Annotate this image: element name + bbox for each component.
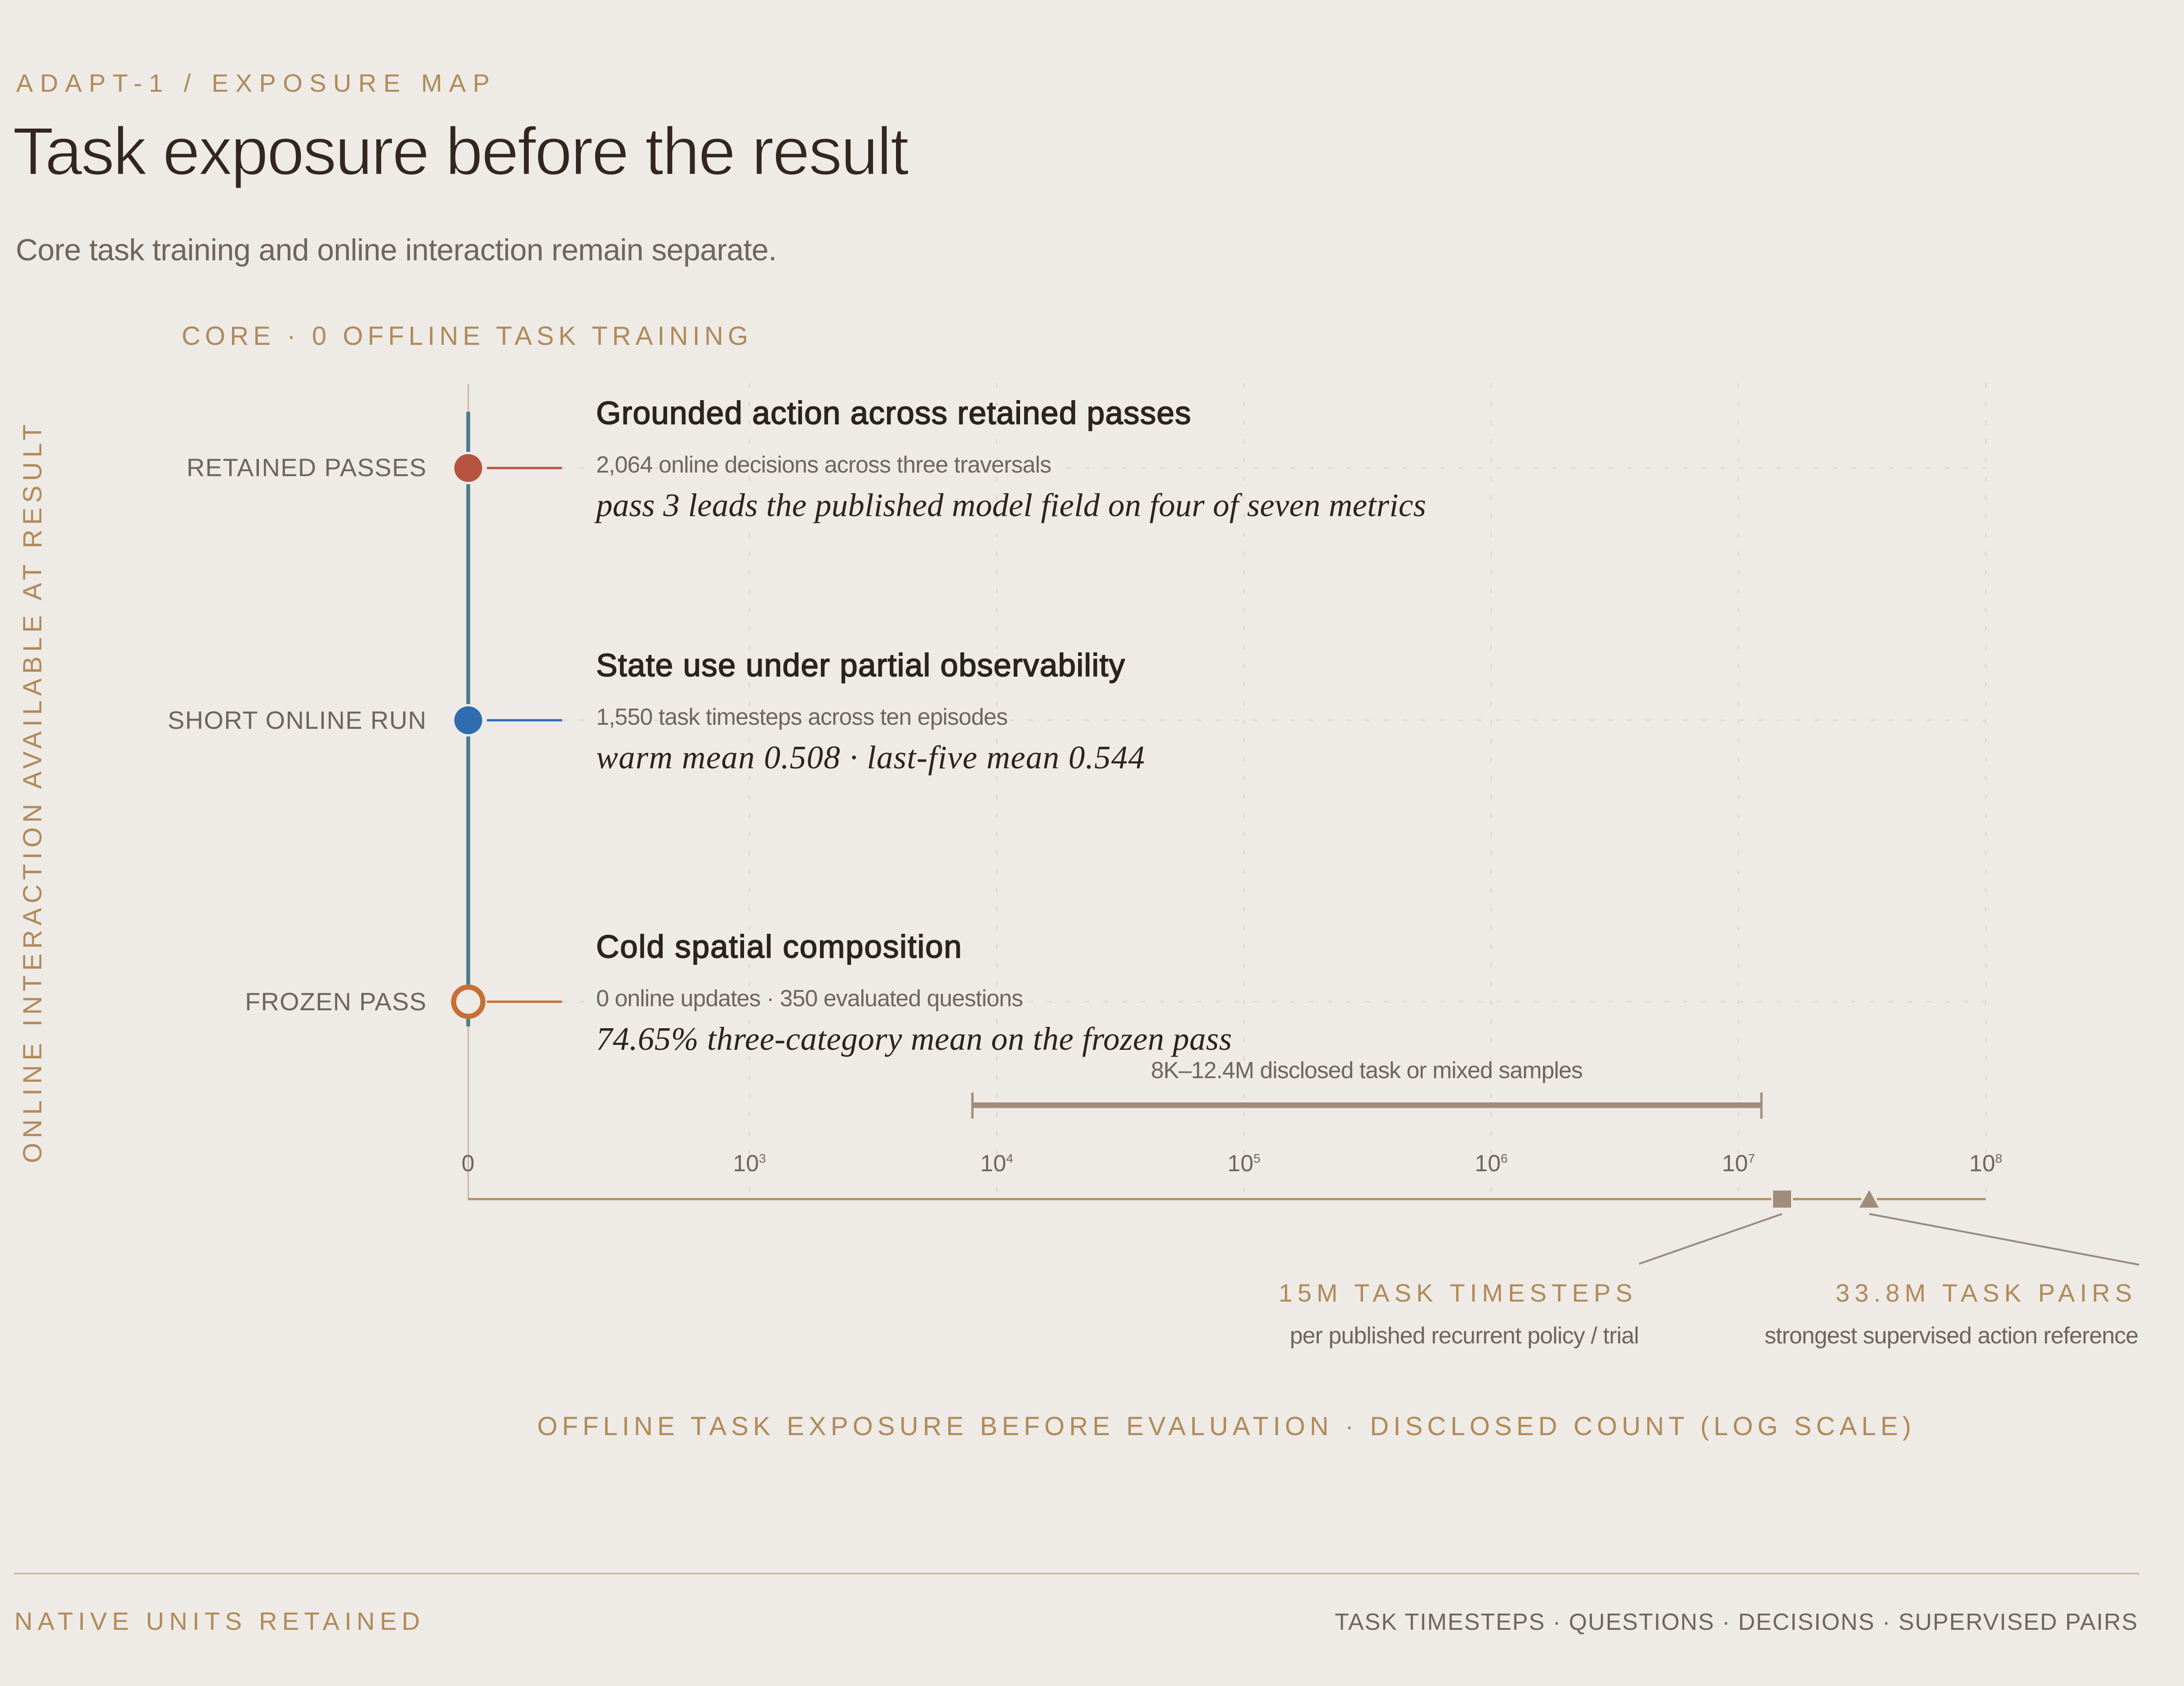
- x axis ticks: 7: [1748, 1151, 1755, 1165]
- row: frozen pass: [245, 929, 1232, 1057]
- x axis ticks: 10: [1722, 1151, 1748, 1177]
- row label: FROZEN PASS: [245, 987, 426, 1016]
- row label: SHORT ONLINE RUN: [168, 706, 426, 734]
- row detail: 2,064 online decisions across three traversals: [596, 452, 1052, 478]
- marker: filled red dot: [454, 454, 482, 482]
- row detail: 0 online updates · 350 evaluated questions: [596, 986, 1023, 1012]
- leader line: 15M: [1639, 1214, 1782, 1264]
- connector: [487, 719, 562, 721]
- connector: [487, 467, 562, 469]
- footer right note: TASK TIMESTEPS · QUESTIONS · DECISIONS · SUPERVISED PAIRS: [1335, 1609, 2137, 1635]
- row label: RETAINED PASSES: [187, 453, 426, 482]
- row: retained passes: [187, 396, 1426, 523]
- row detail: 1,550 task timesteps across ten episodes: [596, 704, 1008, 730]
- x axis ticks: 8: [1995, 1151, 2002, 1165]
- x axis ticks: 10: [1969, 1151, 1995, 1177]
- x axis line: [468, 1198, 1986, 1200]
- connector: [487, 1001, 562, 1003]
- callout: 33.8M task pairs: strongest supervised action reference: [1765, 1323, 2139, 1349]
- eyebrow label: ADAPT-1 / EXPOSURE MAP: [16, 69, 490, 97]
- chart grid: [561, 383, 1986, 1199]
- row heading: Cold spatial composition: [596, 929, 962, 965]
- footer rule: [14, 1573, 2139, 1574]
- x axis ticks: 10: [1475, 1151, 1501, 1177]
- y axis title: ONLINE INTERACTION AVAILABLE AT RESULT: [18, 424, 47, 1163]
- core column label: CORE · 0 OFFLINE TASK TRAINING: [182, 321, 748, 351]
- title: Task exposure before the result: [13, 113, 909, 189]
- x axis ticks: 5: [1253, 1151, 1261, 1165]
- leader line: 33.8M: [1869, 1214, 2139, 1265]
- callout: 15M task timesteps: per published recurrent policy / trial: [1290, 1323, 1639, 1349]
- x axis ticks: 10: [1227, 1151, 1253, 1177]
- range label: 8K–12.4M disclosed task or mixed samples: [1151, 1057, 1583, 1084]
- x axis ticks: 10: [980, 1151, 1006, 1177]
- x axis ticks: [462, 1151, 2002, 1177]
- x axis title: OFFLINE TASK EXPOSURE BEFORE EVALUATION · DISCLOSED COUNT (LOG SCALE): [537, 1412, 1911, 1441]
- footer left note: NATIVE UNITS RETAINED: [14, 1607, 420, 1635]
- row heading: Grounded action across retained passes: [596, 396, 1191, 431]
- y axis line: [468, 384, 469, 1199]
- x axis ticks: 0: [462, 1151, 474, 1177]
- marker: filled blue dot: [454, 706, 482, 734]
- row: short online run: [168, 648, 1145, 776]
- range bar: [971, 1093, 1762, 1119]
- x axis ticks: 10: [733, 1151, 759, 1177]
- row result: warm mean 0.508 · last-five mean 0.544: [596, 739, 1145, 776]
- callout: 15M task timesteps: [1279, 1279, 1639, 1349]
- x axis ticks: 4: [1006, 1151, 1013, 1165]
- marker: triangle 33.8M: [1859, 1190, 1879, 1208]
- callout: 33.8M task pairs: 33.8M TASK PAIRS: [1836, 1279, 2132, 1307]
- row heading: State use under partial observability: [596, 648, 1125, 683]
- row result: pass 3 leads the published model field on four of seven metrics: [594, 487, 1426, 523]
- subtitle: Core task training and online interaction remain separate.: [16, 233, 777, 267]
- marker: square 15M: [1771, 1187, 1793, 1209]
- callout: 33.8M task pairs: [1765, 1279, 2139, 1349]
- x axis ticks: 3: [759, 1151, 766, 1165]
- x axis ticks: 6: [1501, 1151, 1508, 1165]
- callout: 15M task timesteps: 15M TASK TIMESTEPS: [1279, 1279, 1632, 1307]
- row result: 74.65% three-category mean on the frozen pass: [596, 1021, 1232, 1057]
- core online interaction bar: [466, 412, 470, 1026]
- marker: open orange ring: [454, 987, 483, 1016]
